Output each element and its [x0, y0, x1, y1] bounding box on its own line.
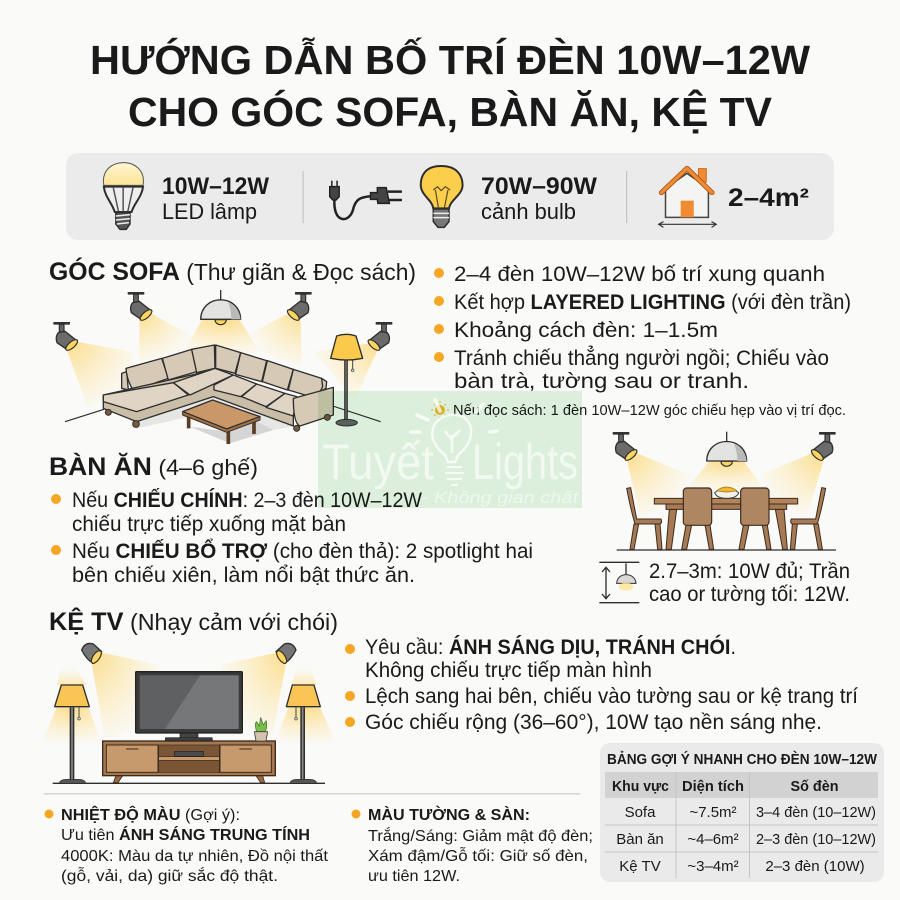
- text block: wall and floor colour: Xám đậm/Gỗ tối: Giữ số đèn,: [368, 846, 588, 865]
- icon: incandescent bulb: [421, 166, 463, 227]
- text block: TV shelf tips: Lệch sang hai bên, chiếu vào tường sau or kệ trang trí: [365, 685, 858, 708]
- table header: Diện tích: [682, 778, 744, 795]
- watermark: Tuyết Lights logo: Tuyết: [322, 434, 434, 490]
- text: LED wattage: [162, 173, 269, 224]
- table rows: ~3–4m²: [687, 858, 739, 875]
- reading tip with sun icon: Nếu đọc sách: 1 đèn 10W–12W góc chiếu hẹp vào vị trí đọc.: [453, 403, 846, 419]
- table header: Khu vực: [612, 778, 669, 795]
- text block: TV shelf tips: Góc chiếu rộng (36–60°), 10W tạo nền sáng nhẹ.: [365, 711, 822, 734]
- text block: TV shelf tips: [345, 635, 858, 734]
- table rows: 3–4 đèn (10–12W): [756, 804, 876, 821]
- watermark: Tuyết Lights logo: Lights: [472, 434, 578, 490]
- illustration: dining table with lights: [613, 432, 836, 550]
- ceiling height note: [599, 560, 850, 606]
- icon: ceiling height: [599, 562, 639, 603]
- table rows: Kệ TV: [619, 858, 661, 875]
- text block: TV shelf tips: Yêu cầu: ÁNH SÁNG DỊU, TRÁNH CHÓI.: [365, 635, 736, 659]
- text block: TV shelf tips: Không chiếu trực tiếp màn hình: [365, 659, 652, 682]
- table header: [605, 772, 878, 798]
- illustration: TV shelf with lights: [42, 643, 337, 783]
- text: incandescent wattage: [481, 173, 597, 224]
- text block: sofa tips: [434, 263, 851, 393]
- title: CHO GÓC SOFA, BÀN ĂN, KỆ TV: [128, 89, 773, 135]
- icon: house with floor width: [659, 168, 716, 227]
- table rows: ~7.5m²: [689, 804, 737, 821]
- text block: dining tips: chiếu trực tiếp xuống mặt bàn: [72, 513, 346, 536]
- text block: sofa tips: Tránh chiếu thẳng người ngồi; Chiếu vào: [454, 346, 829, 370]
- heading: sofa corner: GÓC SOFA (Thư giãn & Đọc sách): [49, 256, 416, 286]
- text block: wall and floor colour: Trắng/Sáng: Giảm mật độ đèn;: [368, 826, 593, 845]
- text: LED wattage: LED lâmp: [162, 199, 257, 224]
- text block: dining tips: Nếu CHIẾU BỔ TRỢ (cho đèn thả): 2 spotlight hai: [72, 539, 533, 563]
- title: HƯỚNG DẪN BỐ TRÍ ĐÈN 10W–12W: [90, 37, 810, 83]
- text block: sofa tips: 2–4 đèn 10W–12W bố trí xung quanh: [454, 263, 825, 286]
- text block: dining tips: Nếu CHIẾU CHÍNH: 2–3 đèn 10W–12W: [72, 489, 422, 512]
- heading: dining table: BÀN ĂN (4–6 ghế): [49, 452, 258, 481]
- text block: wall and floor colour: MÀU TƯỜNG & SÀN:: [368, 805, 530, 824]
- heading: TV shelf: KỆ TV (Nhạy cảm với chói): [49, 606, 338, 636]
- text block: colour temperature: NHIỆT ĐỘ MÀU (Gợi ý):: [61, 805, 240, 824]
- panel: wattage and area summary: [66, 153, 834, 240]
- table rows: Sofa: [625, 804, 656, 821]
- title: [90, 37, 810, 135]
- watermark: Tuyết Lights logo: - Không gian chất: [422, 488, 579, 507]
- ceiling height note: 2.7–3m: 10W đủ; Trần: [649, 560, 850, 583]
- text block: colour temperature: 4000K: Màu da tự nhiên, Đồ nội thất: [61, 848, 329, 865]
- icon: LED bulb: [103, 163, 143, 229]
- text block: sofa tips: Khoảng cách đèn: 1–1.5m: [454, 319, 718, 342]
- icon: power plug and cord: [330, 181, 402, 219]
- text block: wall and floor colour: ưu tiên 12W.: [368, 868, 460, 885]
- text block: colour temperature: (gỗ, vải, da) giữ sắc độ thật.: [61, 866, 278, 885]
- table rows: 2–3 đèn (10W): [765, 858, 865, 875]
- text block: dining tips: bên chiếu xiên, làm nổi bật thức ăn.: [72, 564, 415, 587]
- text: incandescent wattage: cảnh bulb: [481, 199, 576, 224]
- text block: sofa tips: Kết hợp LAYERED LIGHTING (với đèn trần): [454, 291, 851, 314]
- watermark: Tuyết Lights logo: [318, 391, 582, 508]
- table rows: ~4–6m²: [687, 831, 739, 848]
- table header: Số đèn: [790, 778, 838, 795]
- table rows: 2–3 đèn (10–12W): [756, 831, 876, 848]
- ceiling height note: cao or tường tối: 12W.: [649, 583, 850, 606]
- text block: sofa tips: bàn trà, tường sau or tranh.: [454, 370, 749, 393]
- table: quick suggestions: [600, 743, 884, 882]
- text block: dining tips: [51, 489, 533, 587]
- table rows: [616, 804, 876, 875]
- text: incandescent wattage: 70W–90W: [481, 173, 597, 200]
- illustration: sofa with lights: [53, 290, 392, 444]
- text: LED wattage: 10W–12W: [162, 173, 269, 200]
- table title: BẢNG GỢI Ý NHANH CHO ĐÈN 10W–12W: [607, 750, 877, 768]
- text block: colour temperature: [44, 805, 329, 885]
- table rows: Bàn ăn: [616, 831, 664, 848]
- text block: colour temperature: Ưu tiên ÁNH SÁNG TRUNG TÍNH: [61, 825, 310, 844]
- text: area: 2–4m²: [728, 184, 809, 212]
- text block: wall and floor colour: [352, 805, 593, 885]
